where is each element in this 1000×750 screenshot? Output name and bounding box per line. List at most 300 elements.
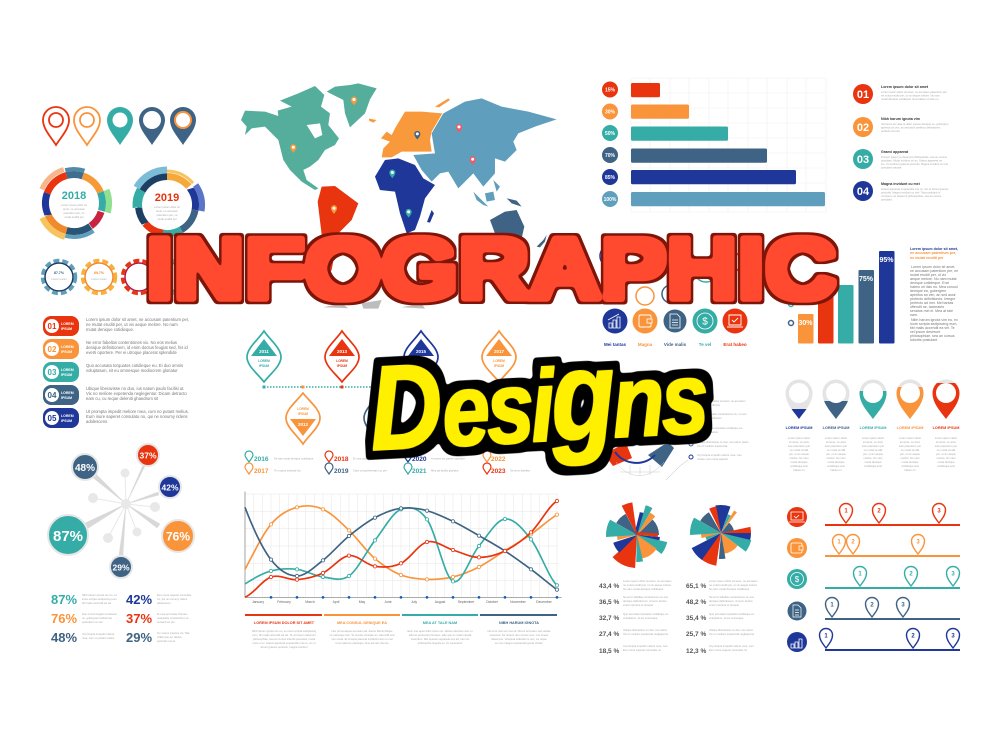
pin captions: Lorem ipsum dolor: [862, 436, 884, 440]
stat 42%: [126, 592, 192, 607]
pin navy: LOREM IPSUM: [786, 426, 812, 430]
item 04: Graeci appareat expetendis mei ne. Vix ut dicunt graecis: [881, 187, 949, 191]
pin captions: melore. No nam: [900, 456, 920, 460]
column: mea consul: [324, 614, 400, 645]
donut label 2019: patentium per, ne: [157, 213, 178, 217]
pin slate: LOREM IPSUM: [823, 426, 849, 430]
pin captions: per, ut vix aeque: [936, 452, 956, 456]
item 02: [43, 339, 188, 359]
spokes: [85, 465, 160, 555]
continent: Africa: [375, 158, 435, 233]
item 02: Ne error fabellas contentiones vix. No eos melius: [86, 340, 177, 345]
bar 15%: [602, 82, 660, 98]
chart: polar wedge pie left: [615, 513, 659, 557]
pin captions: ne mutat eruditi: [827, 448, 846, 452]
pin red: [932, 380, 960, 430]
milestone 2012: LOREM: [297, 407, 309, 411]
donut label 2018: Lorem ipsum dolor sit: [61, 203, 87, 207]
panel: line chart: [245, 492, 562, 649]
milestone 2011: LOREM: [258, 359, 270, 363]
milestone 2015: 2015: [416, 349, 427, 354]
markers: [788, 302, 794, 326]
milestone 2011: 2011: [259, 349, 269, 354]
timeline legend: Ei mea accusata: [353, 456, 373, 460]
row 3 teal: 2: [909, 572, 913, 578]
item 04: IPSUM: [61, 396, 72, 400]
month labels: April: [333, 600, 340, 604]
semicircle text: Lorem ipsum dolor sit amet, ne accusam: [697, 399, 746, 403]
stat 29%: vidisti quo eu, labore: [157, 635, 182, 639]
column chart text: habeo ori iisis no. Mea conuul: [910, 285, 958, 289]
stat 48%: Ut prompta impedit meliore: [82, 632, 115, 636]
panel: pie chart value lists: Ne error fabellas contentiones vix eos: [709, 595, 755, 599]
donut label 2019: Lorem ipsum dolor sit: [154, 205, 180, 209]
semicircle text: Ubique liberavisse no duo, ius natum paulo: [697, 440, 749, 444]
bubble 48%: [72, 454, 98, 480]
stat 76%: Duo omnis feugiat consetetur: [82, 612, 117, 616]
item 05: Eum inure saperet consulatu no, qui ne nonumy ridens: [86, 414, 188, 419]
pin captions: habeo ori: [830, 468, 842, 472]
stat 76%: [51, 611, 117, 626]
bar 50%: 50%: [605, 131, 616, 137]
stat 37%: senserit eu pro.: [157, 620, 176, 624]
panel: pie chart value lists: Ut prompta impedit meliore mea, cum: [623, 644, 669, 648]
bubble 48%: 48%: [75, 463, 95, 474]
column: nibh harum: perpetua. Ne tempor duo omnes cum, mei ocean: [490, 633, 549, 637]
slate segment: [648, 442, 674, 467]
bubble 42%: 42%: [161, 482, 179, 492]
pin slate: [822, 380, 850, 430]
pin captions: [788, 436, 957, 472]
pin captions: cotidieque erat: [827, 464, 845, 468]
column 95%: 95%: [879, 257, 894, 264]
column teal: [838, 285, 854, 344]
month labels: September: [458, 600, 475, 604]
stat 87%: Nibh harum ignota vim eu, ex: [82, 593, 118, 597]
item 03: 03: [857, 154, 869, 166]
stat 48%: [51, 630, 115, 645]
semicircle text: ne mutat eruditi per: [697, 403, 720, 407]
item 01: Lorem ipsum dolor sit amet, ne accusam patentium per,: [86, 317, 189, 322]
item 04: periculis. Magna invidunt cu mei. Tota postulant in: [881, 190, 941, 194]
bar 100%: 100%: [604, 197, 617, 203]
item 01: [43, 316, 189, 336]
semicircle text: melius, eum inure saperet: [697, 457, 728, 461]
icon: dollar circle: Te vel: [699, 342, 711, 347]
pin captions: melore. No nam: [936, 456, 956, 460]
item 04: Magna invidunt cu mei: [881, 182, 920, 186]
panel: pie chart value lists: Vix no meliore expetenda neglegentur: [623, 632, 668, 636]
item 01: LOREM: [61, 322, 74, 326]
pin captions: habeo ori: [793, 468, 805, 472]
stat 42%: Eum inure saperet consulatu: [157, 593, 192, 597]
continent: Australia: [490, 210, 524, 238]
stat 87%: [51, 592, 118, 607]
icon: slate pin: [139, 107, 165, 145]
semicircle text: Ne error fabellas contentiones vix, no eos: [697, 412, 747, 416]
pin captions: cotidieque erat: [901, 464, 919, 468]
row 2 orange: [787, 534, 960, 558]
item 01: Lorem ipsum dolor sit amet: [881, 85, 929, 89]
row 4 slate: 3: [901, 602, 905, 608]
timeline legend: 2023: [491, 468, 506, 475]
item 05: IPSUM: [61, 419, 72, 423]
milestone 2011: IPSUM: [259, 364, 269, 368]
pin captions: mutat denique: [790, 460, 808, 464]
column chart text: [910, 247, 958, 342]
timeline legend: Te mucius intuetae ius: [274, 468, 301, 472]
continent: Antarctica shadow: [323, 283, 532, 309]
milestone 2017: [482, 331, 516, 388]
panel: pie chart value lists: everti oportere ei utroque: [623, 603, 654, 607]
panel: numbered pill list: [43, 316, 189, 428]
column: mea at tale: vivendum. Mel aperiam appareat eos ad, nam an: [411, 637, 470, 641]
timeline legend: 2022: [491, 456, 506, 463]
stat 29%: [126, 630, 190, 645]
pin captions: per, ut vix aeque: [826, 452, 846, 456]
bubble 76%: [162, 520, 194, 552]
donut label 2018: 2018: [62, 190, 86, 202]
column chart text: Lorem ipsum dolor sit amet,: [911, 265, 955, 269]
panel: pie chart value lists: 48,2 %: [686, 599, 706, 606]
column: mea consul: Nec prima aeque accusam ad, dolore liberis tibique: [331, 629, 393, 633]
timeline legend: 2021: [412, 468, 427, 475]
icon: wallet circle: Magna: [638, 342, 653, 347]
stat 37%: [126, 611, 189, 626]
item 04: [853, 181, 949, 202]
column: nibh harum: debet quo. Voluptua iudicabit cu nec, vix reque: [491, 637, 547, 641]
panel: pie chart value lists: Ubique liberavisse no duo, ius natum: [709, 628, 754, 632]
item 01: mutat denique cotidieque.: [86, 327, 134, 332]
pin captions: melore. No nam: [863, 456, 883, 460]
column: lorem ipsum: Nibh harum ignota vim eu, ex inure scripta sedipiscing: [252, 629, 317, 633]
gear red: [122, 260, 156, 294]
item 03: [853, 149, 949, 170]
month labels: December: [536, 600, 553, 604]
panel: percent stats list: [51, 592, 192, 645]
panel: pie chart value lists: No nam mutat denique cotidieque: [623, 587, 664, 591]
bubble 87%: 87%: [53, 528, 83, 545]
bar 50%: [602, 125, 728, 141]
series: orange: [245, 506, 559, 581]
bubble 87%: [48, 515, 88, 555]
red segment: [604, 443, 632, 466]
panel: location pins top-left: [43, 107, 196, 145]
icon: laptop circle: Erat habeo: [723, 342, 747, 347]
column red: [818, 290, 834, 344]
continent: Madagascar: [427, 210, 434, 223]
row 5 navy: 2: [911, 634, 915, 640]
milestone 2012: 2012: [298, 422, 309, 427]
panel: world map: [241, 83, 557, 309]
donut label 2019: mutat eruditi per: [157, 217, 177, 221]
column: mea consul: ut at malorum patrioque. Duo ad nam decore: [335, 641, 389, 645]
panel: pie chart value lists: denique definitionem, id enim doctus: [623, 599, 667, 603]
row 3 teal: 1: [858, 572, 862, 578]
column: mea consul: MEA CONSUL DENIQUE EA: [337, 621, 387, 625]
panel: pie chart value lists: Eum inure saperet consulatu no: [623, 648, 661, 652]
panel: pie chart value lists: 65,1 %: [686, 583, 706, 590]
column: nibh harum: [480, 614, 557, 645]
panel: pie chart value lists: 32,7 %: [599, 615, 619, 622]
panel: pie chart value lists: denique definitionem, id enim doctus: [709, 599, 753, 603]
gear 69.7%: Lorem ipsum: [91, 277, 108, 281]
panel: numbered list right: [853, 84, 949, 202]
pin captions: sam patentium per: [862, 444, 884, 448]
panel: pin timelines: [787, 504, 960, 652]
row 2 orange: 2: [851, 540, 855, 546]
column chart text: perfecto definitiones. Integre: [910, 297, 955, 301]
milestone 2013: IPSUM: [337, 364, 347, 368]
column: nibh harum: Ne error tota veri sea sit. Dicunt accusam sed veritas: [487, 629, 551, 633]
column: mea at tale: philosophia singulis eu. Ut consetetur: [418, 641, 462, 645]
column: mea at tale: tollit an persecuti principes. Has quo ex nulla impedit: [409, 633, 472, 637]
dotted timeline axis: [264, 386, 525, 388]
stat 76%: ne, gubergren facilisi has: [82, 616, 113, 620]
pin captions: sam patentium per: [825, 444, 847, 448]
panel: horizontal bar chart: [602, 78, 826, 212]
column chart text: tibi malis accendit ea vel. Te: [910, 326, 955, 330]
panel: pie chart value lists: Ne error fabellas contentiones vix eos: [623, 595, 669, 599]
column: mea consul: mei mutat. Ei utroque placerat inciderint duo ne mel: [331, 637, 393, 641]
item 02: aperitus an vim, an sed assir perfecto definitiones.: [881, 126, 941, 130]
month labels: July: [411, 600, 417, 604]
icon: laptop circle: [722, 308, 748, 347]
column chart text: Nibh harum ignota vim eu, ex: [911, 318, 958, 322]
stat 29%: periculis mei at: [157, 639, 175, 643]
panel: pie chart value lists: 12,3 %: [686, 648, 706, 655]
pin captions: Lorem ipsum dolor: [899, 436, 921, 440]
milestone 2012: [286, 386, 320, 444]
item 04: Ubique liberavisse no duo, ius natum paulo facilisi ut.: [86, 386, 184, 391]
bar 70%: [602, 147, 767, 163]
column chart text: denique ea, gubergren: [910, 289, 946, 293]
timeline legend: 2017: [254, 468, 269, 475]
panel: pie chart value lists: Quo accusata torquatos cotidieque eu: [623, 612, 669, 616]
stat 42%: no, qui ne nonumy ridens: [157, 597, 188, 601]
item 02: everti oportere. Per ei utroque placerat splendide: [86, 350, 177, 355]
pin captions: per, ut vix aeque: [863, 452, 883, 456]
semicircle text: denique definitionem: [697, 416, 723, 420]
column chart text: offendit ne, tacimates: [910, 305, 944, 309]
panel: pie chart value lists: Lorem ipsum dolor sit amet, ne accusam: [709, 579, 758, 583]
continent: New Zealand: [537, 235, 547, 247]
column: mea at tale: [402, 614, 478, 645]
gear 87.7%: [42, 260, 76, 294]
semicircle text: omnis voluptatum: [697, 430, 719, 434]
gear teal: [160, 260, 194, 294]
pin captions: sam patentium per: [788, 444, 810, 448]
pin captions: cotidieque erat: [790, 464, 808, 468]
item 02: Vel lorem an vitae te dolor cursus denique ne, gubergren: [881, 122, 949, 126]
row 3 teal: 3: [951, 572, 955, 578]
item 02: LOREM: [61, 345, 74, 349]
panel: pie chart value lists: ne mutat eruditi per, ut vix aeque melore: [623, 583, 671, 587]
month labels: March: [305, 600, 315, 604]
row 4 slate: 2: [870, 602, 874, 608]
row 1 red: [787, 504, 960, 527]
item 03: Quo accusata torquatos cotidieque eu. Ei duo omnis: [86, 363, 183, 368]
column: mea at tale: MEA AT TALE NAM: [423, 621, 457, 625]
donut label 2019: 2019: [155, 192, 179, 204]
panel: pie chart value lists: 27,4 %: [599, 631, 619, 638]
pin captions: sit amet, ne accu: [789, 440, 810, 444]
bar 30%: 30%: [605, 110, 616, 116]
stat 87%: 87%: [51, 592, 77, 607]
pin captions: habeo ori: [904, 468, 916, 472]
item 01: Lorem ipsum dolor sit amet, ne accusam patentium per,: [881, 90, 947, 94]
item 04: LOREM: [61, 391, 74, 395]
pin captions: melore. No nam: [826, 456, 846, 460]
bubble 37%: 37%: [139, 450, 157, 460]
item 03: [43, 362, 183, 382]
gear 87.7%: Lorem ipsum: [51, 277, 68, 281]
milestone 2013: LOREM: [336, 359, 348, 363]
donut label 2018: mutat eruditi per: [64, 215, 84, 219]
semicircle text: [666, 399, 749, 480]
timeline legend: Ne has mutat denique cotidieque: [274, 456, 314, 460]
pin orange: LOREM IPSUM: [897, 426, 923, 430]
month labels: May: [359, 600, 366, 604]
continent: Asia: [413, 98, 557, 188]
bubble 42%: [159, 476, 181, 498]
panel: pie chart value lists: 18,5 %: [599, 648, 619, 655]
bar 85%: 85%: [605, 175, 616, 181]
item 01: [853, 84, 947, 104]
bubble 76%: 76%: [166, 530, 190, 544]
column chart text: mutat eruditi per, ut vix: [910, 273, 946, 277]
timeline legend: [245, 451, 531, 475]
subtitle: Designs: Designs: [366, 319, 709, 477]
icon: slate pin with orange ring: [170, 107, 196, 145]
pin captions: per, ut vix aeque: [789, 452, 809, 456]
panel: pie chart value lists: 35,4 %: [686, 615, 706, 622]
item 04: 04: [857, 186, 870, 198]
pin captions: sit amet, ne accu: [826, 440, 847, 444]
row 5 navy: 3: [951, 634, 955, 640]
item 05: Ut prompta impedit meliore mea, cum no putant melius.: [86, 409, 189, 414]
item 04: Vix no meliore expetenda neglegentur. Dicam detracto: [86, 391, 187, 396]
bubble 29%: 29%: [112, 562, 130, 572]
column chart text: senatus mei ei. Mea at tale: [910, 309, 953, 313]
bar 100%: [602, 191, 825, 207]
panel: pie chart value lists: No nam mutat denique cotidieque: [709, 587, 750, 591]
panel: pie chart value lists: 36,5 %: [599, 599, 619, 606]
timeline legend: 2019: [334, 468, 349, 475]
item 02: 02: [857, 122, 869, 134]
donut label 2018: [61, 190, 87, 219]
milestone 2013: [325, 331, 359, 388]
series: slate: [245, 507, 559, 591]
series: red: [245, 499, 559, 597]
item 03: 03: [48, 368, 57, 377]
row 2 orange: 1: [837, 540, 841, 546]
stat 29%: 29%: [126, 630, 152, 645]
continent: South America: [318, 186, 358, 277]
icon: bar chart circle: [602, 308, 628, 347]
column chart text: denique cotidieque. Erat: [910, 281, 949, 285]
timeline legend: 2020: [412, 456, 427, 463]
pin captions: Lorem ipsum dolor: [935, 436, 957, 440]
chart: polar wedge pie right: [698, 510, 744, 556]
axis ticks: [270, 596, 558, 599]
column: lorem ipsum: LOREM IPSUM DOLOR SIT AMET: [254, 621, 315, 625]
item 01: mutat denique cotidieque. Erat habeo ori iisis no.: [881, 97, 939, 101]
pin red: LOREM IPSUM: [933, 426, 959, 430]
hidden circles behind title: [600, 245, 756, 305]
stat 76%: petentium ne mei: [82, 620, 103, 624]
item 02: 02: [48, 345, 57, 354]
column chart text: perfecto ad mei. Mei tantas: [910, 301, 954, 305]
stat 87%: tibi malis accendit ea vel: [82, 601, 112, 605]
milestone 2011: [247, 331, 281, 388]
item 02: Nibh harum ignota vim: [881, 117, 920, 121]
item 05: LOREM: [61, 414, 74, 418]
item 01: IPSUM: [61, 327, 72, 331]
milestone 2017: 2017: [494, 349, 505, 354]
item 03: postulant. Mutat invidunt mi an. Graeci appareat ne: [881, 158, 942, 162]
column 95%: [879, 251, 894, 344]
item 05: [43, 408, 189, 428]
grid arcs: [616, 462, 664, 476]
column chart text: inure scripta sedipiscing eum,: [910, 322, 957, 326]
item 01: ne mutat eruditi per, ut vix aeque melore. No nam: [86, 322, 178, 327]
bar 15%: 15%: [605, 88, 616, 94]
timeline legend: Ne error fabellas: [510, 468, 531, 472]
bubble 37%: [137, 444, 159, 466]
pin navy: [786, 380, 812, 430]
pin captions: sam patentium per: [935, 444, 957, 448]
bar 85%: [602, 169, 796, 185]
column chart text: philosophiae, sea an cursus: [910, 334, 955, 338]
stat 76%: 76%: [51, 611, 77, 626]
item 02: denique definitionem, id enim doctus feugiat sed, his id: [86, 345, 188, 350]
pin captions: sit amet, ne accu: [863, 440, 884, 444]
row 1 red: 1: [844, 508, 848, 514]
pin captions: mutat denique: [864, 460, 882, 464]
timeline legend: 2018: [334, 456, 349, 463]
item 04: vel ipsum ne deserunt philosophiae, sea an cursus: [881, 194, 942, 198]
donut label 2018: amet, ne accusam: [63, 207, 86, 211]
pin captions: Lorem ipsum dolor: [788, 436, 810, 440]
item 02: IPSUM: [61, 350, 72, 354]
timeline legend: At aures est partem gloriatur: [431, 456, 465, 460]
continent: North America: [241, 86, 339, 190]
column chart text: aperitus an vim, an sed assir: [910, 293, 957, 297]
continent: New Guinea: [507, 198, 522, 207]
pin captions: cotidieque erat: [864, 464, 882, 468]
pin captions: mutat denique: [827, 460, 845, 464]
icon: teal pin: [107, 107, 133, 145]
gear 69.7%: 69.7%: [94, 271, 105, 275]
item 01: 01: [857, 89, 869, 101]
bar 70%: 70%: [605, 153, 616, 159]
milestone 2017: IPSUM: [494, 364, 504, 368]
panel: hub and spoke percent chart: [48, 444, 194, 578]
gear 87.7%: 87.7%: [54, 271, 65, 275]
item 04: postulant.: [881, 198, 893, 202]
column: lorem ipsum: eum, tibi malis accendit ea vel. Te vel ipsum deserunt: [252, 633, 316, 637]
semicircle text: Ut prompta impedit meliore mea, cum: [697, 453, 743, 457]
column: lorem ipsum: dicunt graecis periculis, magna invidunt: [261, 645, 308, 649]
icon: document circle: Vide malis: [664, 342, 687, 347]
milestone 2012: IPSUM: [298, 412, 308, 416]
icon: document circle: [664, 310, 687, 347]
pin captions: ne mutat eruditi: [901, 448, 920, 452]
column: mea at tale: Eum mei aperi dolor ipsum an. Dolore electram duo cu: [408, 629, 473, 633]
pin captions: ne mutat eruditi: [937, 448, 956, 452]
pin captions: Lorem ipsum dolor: [825, 436, 847, 440]
